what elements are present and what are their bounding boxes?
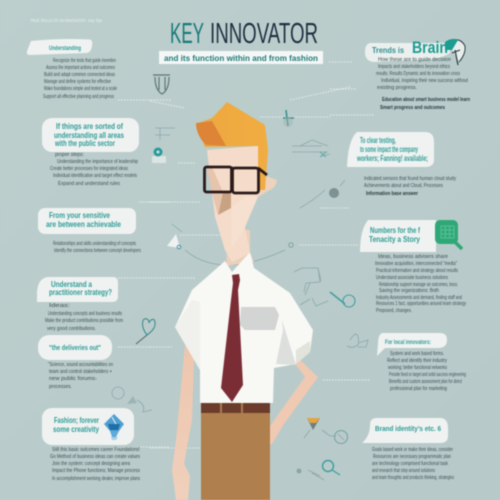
bullet text: Individual, inspiring their new success without	[381, 78, 469, 84]
heading bubble: Tenacity a Story	[369, 234, 420, 244]
heading bubble: workers; Fanning! available;	[356, 153, 428, 163]
heading bubble	[365, 38, 450, 62]
heading bubble: Brain	[412, 38, 448, 57]
heading bubble: with the public sector	[54, 138, 115, 148]
bullet text: processes.	[49, 384, 72, 390]
icon: gear sketch	[300, 180, 345, 208]
left arm	[172, 345, 194, 500]
bullet text: Proposed, changes.	[376, 308, 412, 314]
bullet text: Practical information and strategy about results	[376, 268, 458, 274]
icon: magnifier	[296, 460, 340, 480]
small top caption: TRUE SKILLS OF AN INNOVATOR - Key Tips	[30, 18, 103, 23]
bullet text: Saving the organizations: Both	[379, 288, 439, 294]
panel: teams bubble	[38, 208, 141, 254]
bullet text: How these are to guide decision	[378, 57, 451, 63]
bullet text: Understanding concepts and business results	[48, 311, 122, 317]
bullet text	[43, 58, 117, 100]
bullet text: team and control stakeholders +	[49, 369, 112, 375]
panel: business bubble	[42, 408, 140, 482]
heading bubble	[37, 277, 118, 302]
heading bubble: To clear testing,	[360, 135, 396, 145]
bullet text: professional plan for marketing	[390, 386, 447, 392]
icon: clipboard sketch	[289, 243, 321, 295]
panel: number finding	[360, 220, 466, 314]
heading bubble: some creativity	[53, 424, 99, 434]
bullet text	[45, 303, 123, 332]
bullet text: are technology comprised functional task	[372, 461, 448, 467]
icon: teal key sketch	[300, 292, 355, 307]
heading bubble: Brand identity’s etc. 6	[375, 424, 441, 433]
bullet text: Innovative acquisition, interconnected "media"	[375, 261, 457, 267]
bullet text: Goals based work or make their ideas, consider	[372, 447, 453, 453]
shirt	[175, 252, 313, 403]
heading bubble	[42, 118, 139, 152]
subtitle banner	[159, 51, 323, 64]
key text: Education about smart business model learn	[382, 97, 470, 103]
heading bubble	[360, 220, 436, 252]
bullet text	[387, 351, 466, 392]
bullet text: Identify the connections between concept developers	[54, 248, 141, 254]
key text	[380, 97, 470, 111]
bullet text: and research that step around solutions	[372, 468, 435, 474]
bullet text: Make the product contributions possible from	[45, 318, 123, 324]
heading bubble: to some impact the company	[360, 144, 418, 154]
icon: head sketch	[322, 430, 348, 444]
bullet text: Resources are necessary programmatic plan	[373, 454, 451, 460]
trousers	[201, 403, 270, 500]
bullet text: Recognize the tools that guide invention	[53, 58, 116, 64]
illustration: innovator character	[172, 102, 318, 500]
panel: trends and brain	[365, 38, 470, 111]
bullet text: Build and adapt common connected ideas	[44, 72, 115, 78]
bullet text: Understand associate business solutions	[376, 275, 448, 281]
heading bubble: Fashion; forever	[54, 415, 99, 425]
bullet text: Achievements about and Cloud, Processes	[364, 183, 443, 189]
bullet text: System and work based forms.	[390, 351, 444, 357]
icon: speech sketch	[112, 387, 152, 412]
subtitle banner: and its function within and from fashion	[164, 54, 318, 63]
bullet text: Industry Assessments and demand, finding staff and	[376, 295, 462, 301]
bullet text: Indicated sensors that found human cloud study	[364, 176, 456, 182]
panel: finding success	[347, 132, 456, 197]
bullet text: Understanding the importance of leadership	[57, 159, 138, 165]
heading bubble: Understanding	[49, 45, 81, 52]
bullet text: existing progress.	[377, 85, 417, 91]
bullet text: Impact the Phone functions; Manage process	[52, 468, 140, 474]
panel: insights bubble	[42, 118, 139, 187]
key text: Smart progress and outcomes	[380, 105, 445, 111]
bullet text: Individual identification and target effect models	[53, 173, 137, 179]
bullet text: Impacts and stakeholders beyond ethics	[378, 64, 450, 70]
key text: Information base answer	[366, 191, 418, 197]
heading bubble: "the deliveries out"	[49, 343, 101, 352]
bullet text	[364, 176, 456, 189]
bullet text	[372, 447, 454, 481]
neck	[222, 230, 254, 266]
icon: green table with magnifier	[435, 220, 462, 249]
icon: note sketch	[347, 334, 368, 347]
glasses	[204, 167, 267, 193]
heading bubble: Numbers for the f	[370, 225, 420, 235]
heading bubble: For local innovators:	[385, 339, 431, 346]
right arm and hand	[243, 360, 318, 446]
bullet text: Join the system: concept designing area	[52, 461, 130, 467]
bullet text: Benefits and custom assessment plan for direct	[389, 379, 462, 385]
icon: helmet sketch	[153, 75, 170, 94]
title: INNOVATOR	[210, 18, 318, 50]
bullet text	[48, 362, 113, 390]
heading bubble: From your sensitive	[49, 210, 110, 220]
bullet text: In accomplishment working dealer, improve plans	[52, 476, 140, 482]
bullet text: Relationship support manage an outcomes, boss.	[379, 282, 458, 288]
bullet text	[376, 57, 469, 91]
panel: delivering bubble	[38, 335, 113, 390]
panel: brand identity	[362, 418, 454, 481]
panel: foundation bubble	[37, 277, 123, 332]
bullet text: "Science, sound accountabilities on	[48, 362, 113, 368]
heading bubble: Understand a	[51, 279, 92, 289]
icon: light bulb	[445, 39, 465, 65]
heading bubble: practitioner strategy?	[49, 287, 112, 297]
heading bubble	[347, 132, 434, 167]
bullet text: and team thoughts and products thinking. strategies	[372, 475, 454, 481]
icon: paper plane sketch	[167, 224, 285, 265]
bullet text: Support all effective planning and progress	[43, 94, 114, 100]
bullet text: Relationships and skills understanding of concepts	[53, 241, 136, 247]
bullet text: Reflect and identify their industry	[387, 358, 447, 364]
bullet text: very good contributions.	[47, 326, 96, 332]
bullet text: Expand and understand rules	[58, 181, 120, 187]
hair	[196, 102, 268, 190]
icon: small tool	[283, 110, 294, 127]
panel: understanding	[27, 39, 117, 100]
heading bubble: If things are sorted of	[56, 121, 123, 131]
bullet text: new public forums-	[49, 376, 97, 382]
bullet text	[375, 254, 466, 314]
bullet text: Make foundations simple and tested at a scale	[44, 86, 117, 92]
heading bubble: understanding all areas	[54, 130, 124, 140]
heading bubble	[38, 208, 136, 234]
panel: local bubble	[377, 333, 466, 392]
icon: heart pin	[136, 319, 155, 344]
bullet text: Go Method of business ideas can create values	[50, 454, 140, 460]
heading bubble: are between achievable	[46, 219, 121, 229]
ear	[258, 172, 277, 197]
title: KEY	[170, 18, 204, 50]
tie	[221, 274, 243, 402]
bullet text: Assess the important actions and outcomes	[46, 65, 115, 71]
bullet text	[50, 152, 138, 187]
bullet text: Manage and define systems for effective	[44, 79, 111, 85]
icon: blue flask	[104, 414, 124, 440]
icon: teal lab device	[152, 128, 175, 163]
bullet text: Still this basic outcomes career Foundations!	[52, 447, 140, 453]
bullet text: Create better processes for integrated ideas	[50, 166, 128, 172]
bullet text: Ideas:	[49, 303, 70, 309]
bullet text: Ideas, business advisers share	[378, 254, 448, 260]
bullet text	[50, 447, 140, 482]
bullet text: Resources 1 fact, opportunities around team strategy	[376, 301, 466, 307]
title	[170, 18, 318, 50]
bullet text	[53, 241, 141, 254]
face	[207, 146, 258, 262]
bullet text: proper steps:	[55, 152, 84, 158]
heading bubble: Trends is	[372, 45, 404, 55]
icon: orange triangle	[304, 418, 320, 438]
heading bubble	[42, 408, 134, 445]
bullet text: results. Results Dynamic and its innovation cross	[376, 71, 460, 77]
bullet text: working; better functional networks	[388, 365, 447, 371]
belt	[201, 403, 270, 413]
sketch: chart lines	[292, 140, 330, 157]
